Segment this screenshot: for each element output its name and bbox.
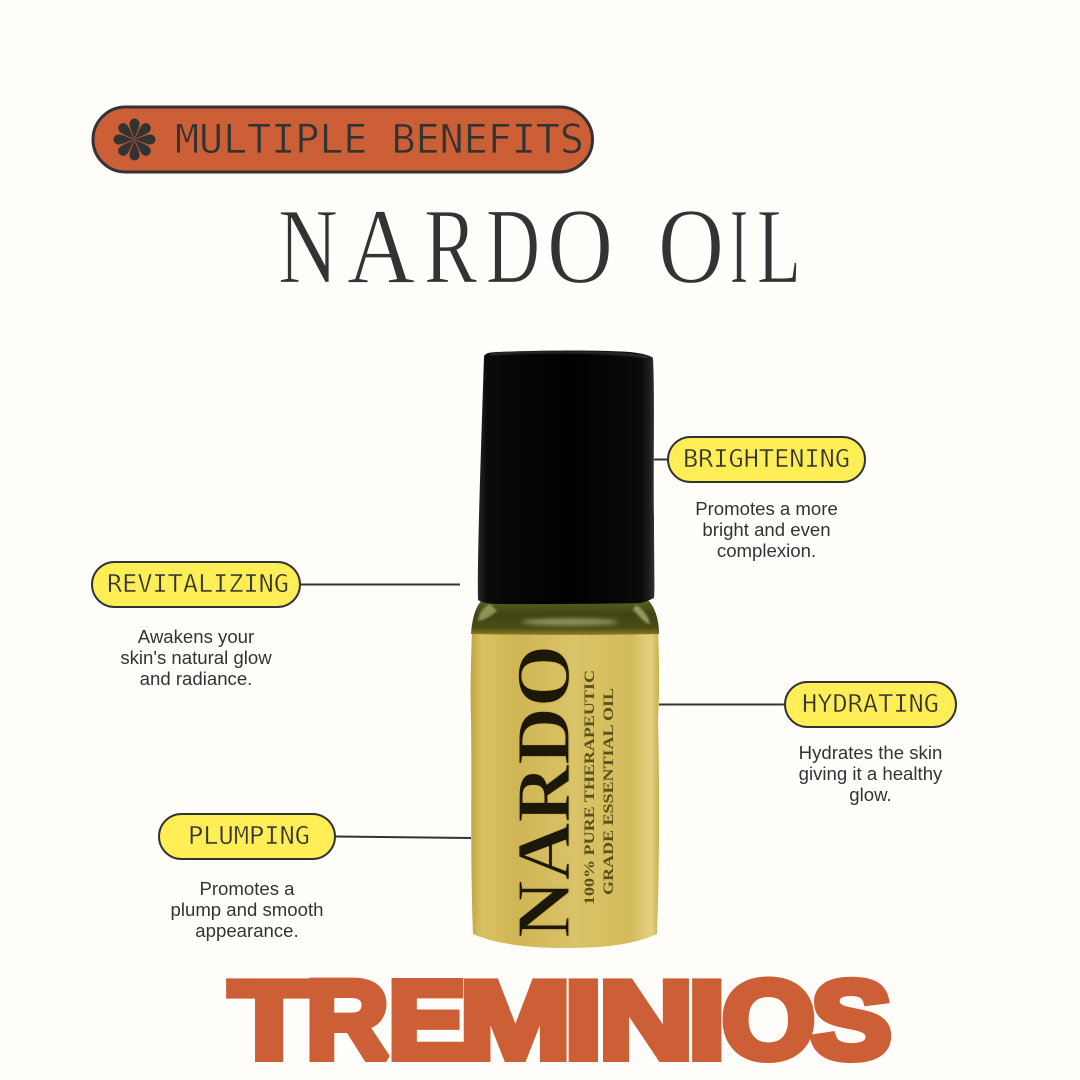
- title: [278, 188, 801, 306]
- brand wordmark: R: [306, 959, 389, 1080]
- connector: hydrating: [659, 704, 785, 706]
- title: O: [658, 188, 724, 306]
- product: bottle: [471, 350, 659, 948]
- description: skin's natural glow: [120, 647, 272, 668]
- brand wordmark: T: [229, 959, 309, 1080]
- bottle cap: [478, 350, 654, 604]
- label text: 100% pure therapeutic: 100% PURE THERAPEUTIC: [582, 670, 598, 905]
- label text: grade essential oil: GRADE ESSENTIAL OIL: [601, 688, 617, 895]
- connector: plumping: [336, 836, 471, 838]
- badge label: MULTIPLE BENEFITS: [175, 117, 584, 163]
- callout: plumping: [159, 814, 335, 941]
- title: N: [278, 188, 338, 306]
- title: D: [486, 188, 540, 306]
- bottle neck: [471, 600, 659, 635]
- title: I: [730, 188, 748, 306]
- title: O: [547, 188, 613, 306]
- brand wordmark: M: [460, 959, 571, 1080]
- description: and radiance.: [140, 668, 252, 689]
- title: A: [347, 188, 415, 306]
- brand wordmark: I: [688, 959, 726, 1080]
- callout: brightening: [668, 437, 865, 561]
- description: Awakens your: [138, 626, 254, 647]
- cap top sheen: [490, 352, 648, 357]
- description: glow.: [849, 784, 892, 805]
- callout: brightening: BRIGHTENING: [683, 444, 850, 473]
- connector: revitalizing: [300, 584, 460, 586]
- label text: NARDO: NARDO: [502, 645, 586, 938]
- description: plump and smooth: [171, 899, 323, 920]
- title: L: [757, 188, 801, 306]
- callout: hydrating: [785, 682, 956, 805]
- description: bright and even: [702, 519, 831, 540]
- brand wordmark: I: [564, 959, 602, 1080]
- callout: plumping: PLUMPING: [188, 821, 310, 850]
- brand wordmark: O: [722, 959, 815, 1080]
- badge: multiple benefits: [93, 107, 592, 172]
- description: Promotes a: [199, 878, 295, 899]
- brand wordmark: S: [811, 959, 892, 1080]
- description: complexion.: [717, 540, 816, 561]
- neck highlights: [478, 604, 650, 624]
- callout: revitalizing: REVITALIZING: [107, 569, 289, 598]
- brand wordmark: E: [388, 959, 466, 1080]
- description: Hydrates the skin: [799, 742, 942, 763]
- brand wordmark: N: [599, 959, 693, 1080]
- neck glow: [522, 618, 618, 626]
- description: Promotes a more: [695, 498, 838, 519]
- description: giving it a healthy: [799, 763, 943, 784]
- title: R: [424, 188, 477, 306]
- bottle body: [471, 630, 659, 948]
- callout: hydrating: HYDRATING: [802, 689, 939, 718]
- icon: flower: [114, 118, 156, 160]
- callout: revitalizing: [92, 562, 300, 689]
- brand wordmark: [229, 959, 891, 1080]
- description: appearance.: [195, 920, 299, 941]
- connector: brightening: [654, 458, 668, 460]
